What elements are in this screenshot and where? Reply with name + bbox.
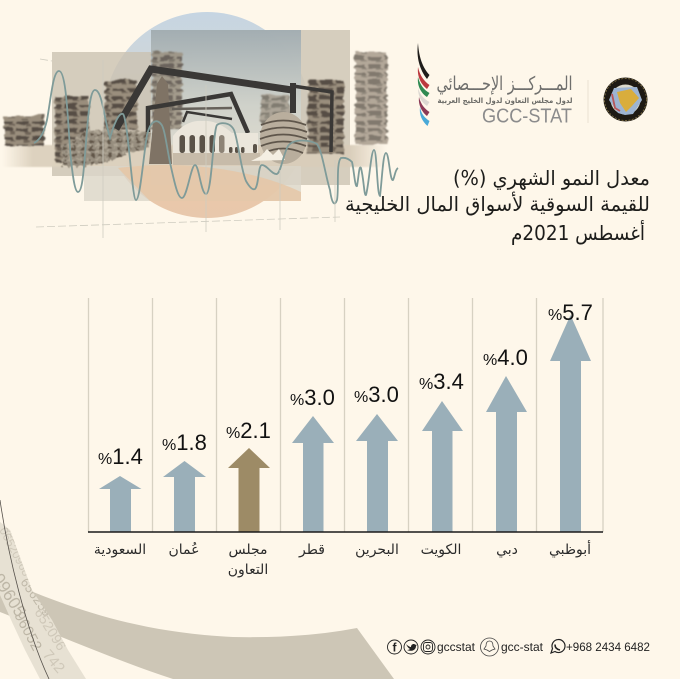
value: Kuwait: %3.4 xyxy=(419,369,464,394)
blue and peach circle xyxy=(104,12,310,218)
icon: snapchat xyxy=(480,638,498,656)
arrow: GCC 2.1 xyxy=(228,448,270,532)
value: Qatar: %3.0 xyxy=(290,385,335,410)
icon: whatsapp xyxy=(551,640,565,653)
label: Qatar: قطر xyxy=(298,542,325,558)
baseline axis xyxy=(88,531,603,533)
value: GCC: %2.1 xyxy=(226,418,271,443)
bottom-left decoration: 652096 xyxy=(31,605,70,653)
arrow: Oman 1.8 xyxy=(163,461,206,532)
title xyxy=(345,166,650,245)
logo wordmark: GCC-STAT xyxy=(482,106,572,128)
logo Arabic subtitle: لدول مجلس التعاون لدول الخليج العربية xyxy=(438,96,573,105)
value: Abu Dhabi: %5.7 xyxy=(548,300,593,325)
label: Kuwait: الكويت xyxy=(421,542,461,558)
label: GCC: مجلس xyxy=(228,542,268,558)
arrow chart xyxy=(88,298,603,578)
title line 3: date: أغسطس 2021م xyxy=(511,220,645,245)
bottom-left decoration: 742 xyxy=(39,647,68,677)
value: Saudi: %1.4 xyxy=(98,444,143,469)
cone tower xyxy=(149,76,172,164)
white palace xyxy=(173,121,260,165)
label: GCC line 2: التعاون xyxy=(228,562,268,578)
label: Dubai: دبي xyxy=(496,542,518,558)
value: Dubai: %4.0 xyxy=(483,345,528,370)
bottom-left decoration: 96052096 xyxy=(3,524,38,572)
title line 2: للقيمة السوقية لأسواق المال الخليجية xyxy=(345,192,650,216)
label: Abu Dhabi: أبوظبي xyxy=(549,540,591,558)
arrow: Kuwait 3.4 xyxy=(422,401,463,532)
title line 1: معدل النمو الشهري (%) xyxy=(453,166,650,191)
handle: gcc-stat: gcc-stat xyxy=(501,640,544,654)
bottom-left decoration: 656259 xyxy=(18,575,55,619)
icon: facebook: f xyxy=(392,640,398,654)
social footer xyxy=(388,638,650,656)
icon: ribbon mark xyxy=(417,43,430,126)
arrow: Bahrain 3.0 xyxy=(356,414,398,532)
collage panels xyxy=(2,30,387,201)
icon: instagram xyxy=(421,640,435,654)
value: Oman: %1.8 xyxy=(162,430,207,455)
handle: gccstat: gccstat xyxy=(437,640,476,654)
bottom-left decoration xyxy=(0,500,394,679)
label: Saudi: السعودية xyxy=(94,542,146,558)
stock line xyxy=(34,71,398,203)
arrow: Abu Dhabi 5.7 xyxy=(550,315,591,532)
logo Arabic name: المـــركـــز الإحـــصائي xyxy=(436,73,572,95)
arrow: Dubai 4.0 xyxy=(486,376,527,532)
bottom-left decoration: 96052 xyxy=(10,609,45,654)
GCC-STAT logo xyxy=(417,43,573,128)
icon: facebook xyxy=(388,640,402,654)
coin-like tower stacks xyxy=(4,52,387,164)
arrow: Qatar 3.0 xyxy=(292,416,334,532)
value: Bahrain: %3.0 xyxy=(354,382,399,407)
icon: twitter xyxy=(404,640,418,654)
icon: GCC emblem xyxy=(588,78,648,123)
rock structure xyxy=(62,128,150,166)
label: Oman: عُمان xyxy=(168,542,200,558)
arrow: Saudi 1.4 xyxy=(99,476,142,532)
thin guide lines xyxy=(36,59,340,238)
round building xyxy=(251,112,307,164)
phone number: +968 2434 6482 xyxy=(566,640,650,654)
label: Bahrain: البحرين xyxy=(355,542,399,558)
black steel frames xyxy=(116,69,332,152)
photo collage: city montage xyxy=(2,12,398,238)
